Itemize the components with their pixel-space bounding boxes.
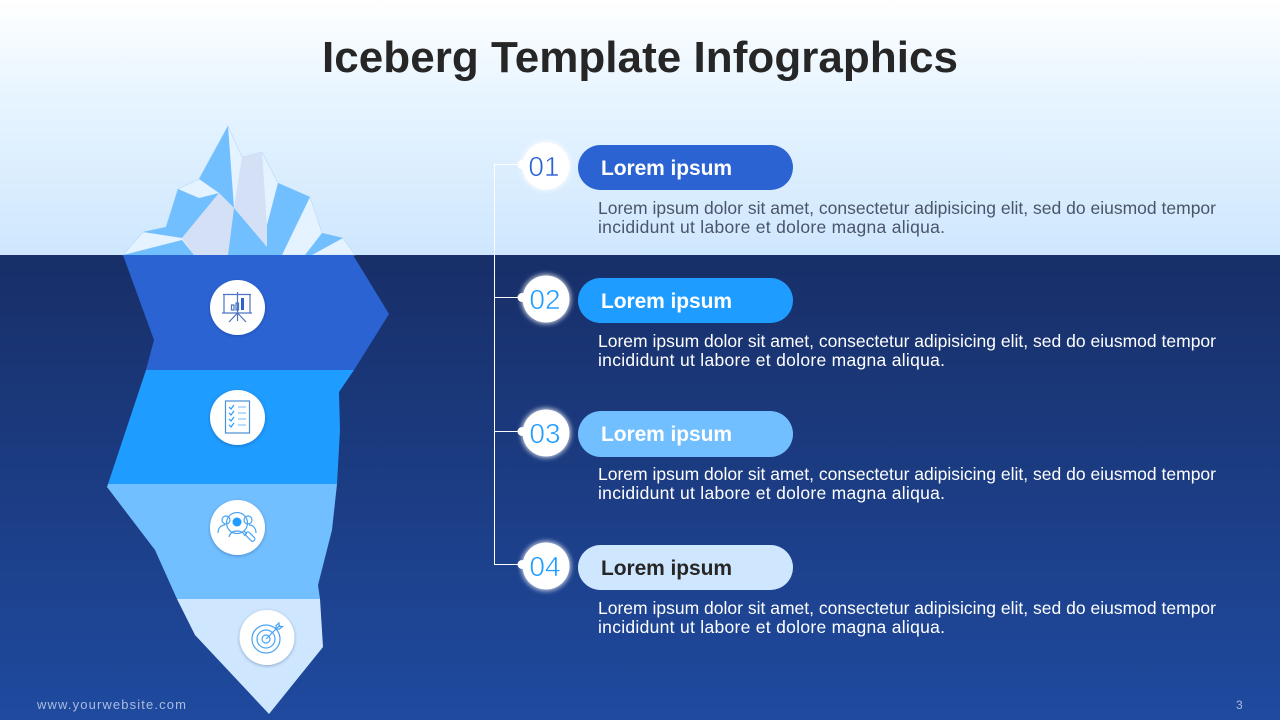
icon: presentation chart xyxy=(210,280,265,335)
description 02 xyxy=(598,331,1216,370)
description 03 xyxy=(598,464,1216,503)
number badge 01 xyxy=(518,141,571,191)
iceberg layer 3 xyxy=(107,484,337,599)
page number: 3 xyxy=(1236,698,1243,712)
label pill 04: Lorem ipsum xyxy=(601,557,732,580)
number badge 02 xyxy=(518,274,571,324)
number badge 03: 03 xyxy=(529,418,561,449)
background: sky xyxy=(0,0,1280,255)
connector lines xyxy=(494,164,521,564)
description 01: Lorem ipsum dolor sit amet, consectetur adipisicing elit, sed do eiusmod tempor xyxy=(598,198,1216,218)
icon: checklist xyxy=(210,390,265,445)
description 04: incididunt ut labore et dolore magna aliqua. xyxy=(598,617,945,637)
icon: people search xyxy=(210,500,265,555)
label pill 02: Lorem ipsum xyxy=(601,290,732,313)
number badge 01: 01 xyxy=(528,151,560,182)
iceberg layer 4 xyxy=(177,599,323,714)
iceberg illustration xyxy=(107,126,389,714)
iceberg tip xyxy=(123,126,355,255)
title: Iceberg Template Infographics xyxy=(322,33,958,82)
description 04: Lorem ipsum dolor sit amet, consectetur adipisicing elit, sed do eiusmod tempor xyxy=(598,598,1216,618)
description 02: incididunt ut labore et dolore magna aliqua. xyxy=(598,350,945,370)
background: deep water xyxy=(0,255,1280,720)
label pill 04 xyxy=(578,545,793,590)
description 03: Lorem ipsum dolor sit amet, consectetur adipisicing elit, sed do eiusmod tempor xyxy=(598,464,1216,484)
label pill 02 xyxy=(578,278,793,323)
number badge 04: 04 xyxy=(529,551,561,582)
number badge 04 xyxy=(518,541,571,591)
number badge 02: 02 xyxy=(529,284,561,315)
description 02: Lorem ipsum dolor sit amet, consectetur adipisicing elit, sed do eiusmod tempor xyxy=(598,331,1216,351)
description 01: incididunt ut labore et dolore magna aliqua. xyxy=(598,217,945,237)
item 04 xyxy=(518,541,1216,637)
iceberg layer 2 xyxy=(108,370,354,484)
label pill 01: Lorem ipsum xyxy=(601,157,732,180)
description 03: incididunt ut labore et dolore magna aliqua. xyxy=(598,483,945,503)
item 01 xyxy=(518,141,1216,237)
label pill 03 xyxy=(578,411,793,457)
description 04 xyxy=(598,598,1216,637)
label pill 01 xyxy=(578,145,793,190)
footer website: www.yourwebsite.com xyxy=(36,697,186,712)
number badge 03 xyxy=(518,408,571,458)
item 02 xyxy=(518,274,1216,370)
iceberg layer 1 xyxy=(123,255,389,370)
icon: target xyxy=(240,610,294,665)
label pill 03: Lorem ipsum xyxy=(601,423,732,446)
description 01 xyxy=(598,198,1216,237)
item 03 xyxy=(518,408,1216,503)
